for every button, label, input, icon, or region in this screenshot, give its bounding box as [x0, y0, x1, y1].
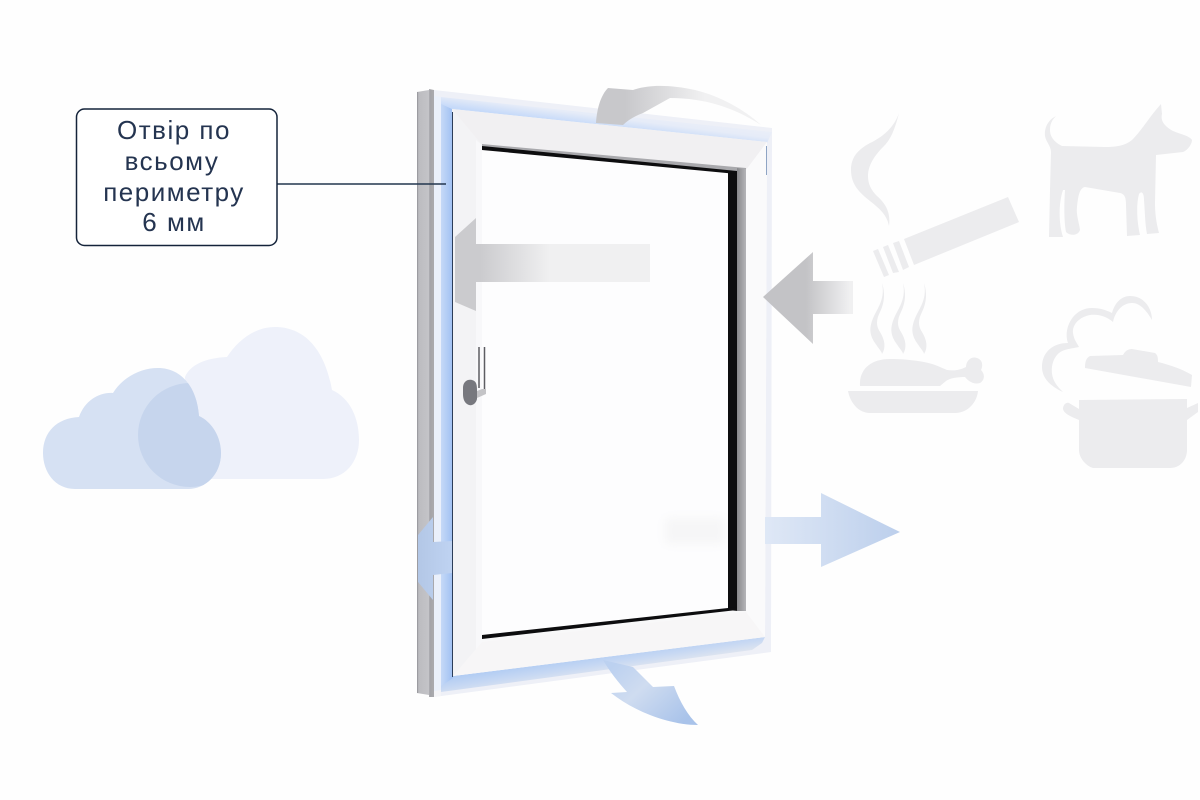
- arrow: grey incoming right: [763, 252, 853, 344]
- icon: dog: [1045, 104, 1192, 237]
- callout text: Отвір по: [117, 115, 231, 145]
- outer frame left pale band: [434, 96, 441, 691]
- icon: roast chicken on plate: [848, 283, 984, 413]
- callout text: [103, 115, 245, 237]
- icon: pot with steam: [1042, 296, 1198, 468]
- icon: cigarette with smoke: [851, 113, 1019, 277]
- handle: [463, 347, 486, 405]
- arrow: blue bottom curved: [603, 660, 698, 725]
- clouds: [43, 327, 359, 489]
- black seal right: [728, 171, 738, 611]
- sash: [452, 109, 767, 676]
- dark gap edge: [452, 112, 454, 677]
- bottom gap band: [441, 637, 765, 692]
- callout box: [76, 109, 277, 246]
- callout text: периметру: [103, 177, 245, 207]
- black seal bottom: [482, 607, 737, 639]
- glass: [482, 147, 730, 637]
- pot: [1063, 399, 1198, 468]
- handle base: [463, 380, 477, 405]
- outer frame side strip: [417, 89, 434, 697]
- steam cloud: [1042, 296, 1152, 392]
- front cloud: [43, 368, 221, 489]
- handle lever: [479, 347, 484, 392]
- glass smudge: [665, 518, 725, 544]
- cloud overlap: [138, 383, 221, 487]
- cigarette body: [904, 197, 1019, 265]
- sash left rail: [452, 109, 482, 676]
- arrow: grey across sash: [455, 218, 650, 311]
- right edge mark: [766, 146, 768, 175]
- back cloud: [185, 327, 359, 479]
- top gap glow: [441, 97, 772, 143]
- callout: [76, 109, 277, 246]
- sash left rail inner: [476, 140, 482, 650]
- arrow: grey curved over top: [596, 86, 761, 125]
- sash right rail: [746, 142, 767, 637]
- chicken: [860, 357, 984, 386]
- window: [417, 89, 772, 697]
- grey reveal right: [737, 168, 746, 611]
- handle neck: [477, 389, 486, 398]
- callout text: всьому: [125, 146, 219, 176]
- lid: [1085, 349, 1192, 387]
- smoke: [851, 113, 899, 226]
- left gap band: [441, 104, 453, 686]
- arrow: blue outgoing right: [765, 493, 900, 567]
- callout connector line: [277, 183, 446, 185]
- sash top rail: [452, 109, 767, 170]
- callout text: 6 мм: [142, 207, 206, 237]
- left pale band bottom: [434, 690, 441, 697]
- outer frame: [434, 90, 772, 697]
- cigarette filter: [873, 249, 889, 277]
- arrow: blue left side: [418, 517, 452, 600]
- grey reveal top: [482, 144, 746, 172]
- sash bottom rail: [453, 612, 765, 676]
- steam lines: [870, 283, 884, 354]
- plate: [848, 391, 978, 413]
- black seal top: [482, 146, 737, 174]
